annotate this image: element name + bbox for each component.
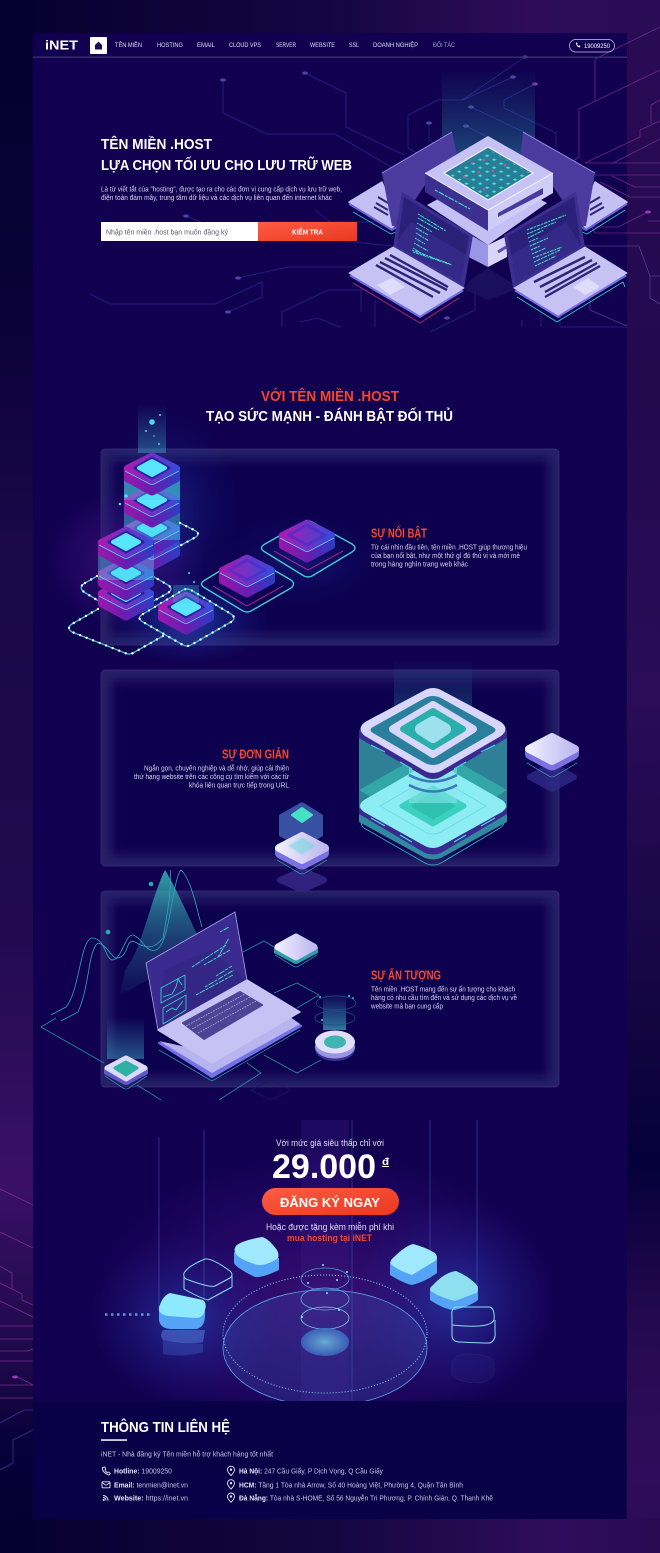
heading: su don gian: SỰ ĐƠN GIẢN: [222, 746, 289, 762]
heading: su noi bat: SỰ NỔI BẬT: [371, 526, 427, 540]
body: su noi bat: của bạn nổi bật, như một thứ gì đó thú vị và mới mẻ: [371, 552, 520, 560]
heading: su an tuong: SỰ ẤN TƯỢNG: [371, 968, 441, 982]
search form: [101, 222, 357, 241]
solid tracks: [202, 521, 355, 612]
laptop: [146, 912, 301, 1077]
price label: Với mức giá siêu thấp chỉ với: [276, 1138, 384, 1148]
illustration: glowing block towers: [45, 403, 380, 665]
illustration: server with laptops: [349, 72, 627, 323]
body: su don gian: Ngắn gọn, chuyên nghiệp và dễ nhớ, giúp cải thiện: [144, 764, 289, 772]
body: su noi bat: Từ cái nhìn đầu tiên, tên miền .HOST giúp thương hiệu: [371, 542, 527, 552]
dotted tracks: [69, 523, 234, 654]
hero description: Là từ viết tắt của "hosting", được tạo ra cho các đơn vị cung cấp dịch vụ lưu trữ web,: [101, 184, 342, 194]
illustration: glowing platform: [85, 1120, 565, 1450]
menu items: EMAIL: [197, 43, 216, 49]
search form: KIỂM TRA: [292, 227, 323, 236]
single blocks: [158, 594, 214, 634]
contact list: [102, 1466, 493, 1503]
footer: [33, 1401, 627, 1519]
body: su an tuong: Tên miền .HOST mang đến sự ấn tượng cho khách: [371, 984, 515, 994]
walls: [382, 132, 595, 226]
body: su don gian: thứ hạng website trên các công cụ tìm kiếm với các từ: [134, 772, 289, 781]
pricing section: [85, 1120, 565, 1450]
illustration: laptop with charts: [41, 870, 356, 1100]
hero title: LỰA CHỌN TỐI ƯU CHO LƯU TRỮ WEB: [101, 156, 352, 174]
footer heading: THÔNG TIN LIÊN HỆ: [101, 1418, 230, 1436]
body: su don gian: khóa liên quan trực tiếp trong URL: [189, 780, 289, 790]
menu items: HOSTING: [157, 43, 183, 49]
phone pill: [570, 40, 614, 52]
particles: [119, 414, 195, 583]
heading underline: [101, 1439, 127, 1441]
menu items: TÊN MIỀN: [115, 41, 142, 49]
price: đ: [382, 1157, 390, 1168]
section heading: VỚI TÊN MIỀN .HOST: [261, 387, 399, 405]
back laptops: [349, 182, 627, 234]
hero description: [101, 184, 342, 202]
section heading: TẠO SỨC MẠNH - ĐÁNH BẬT ĐỐI THỦ: [206, 407, 453, 425]
lower server: [427, 172, 547, 300]
floating blocks: [159, 1237, 495, 1383]
cylinder: [301, 1268, 349, 1329]
tagline: iNET - Nhà đăng ký Tên miền hỗ trợ khách hàng tốt nhất: [101, 1450, 273, 1458]
email: Email: tenmien@inet.vn: [114, 1480, 188, 1489]
logo: iNET: [45, 38, 78, 52]
menu items: SSL: [349, 43, 360, 49]
tower front: [98, 580, 154, 620]
teal square block: [104, 1017, 148, 1089]
da nang address: Đà Nẵng: Tòa nhà S-HOME, Số 56 Nguyễn Tri Phương, P. Chính Gián, Q. Thanh Khê: [239, 1494, 493, 1503]
dotted trail: [105, 1313, 153, 1316]
price: 29.000: [272, 1148, 376, 1186]
server top cube: [425, 136, 553, 231]
tower back: [138, 403, 166, 453]
body: su an tuong: hàng có nhu cầu tìm đến và sử dụng các dịch vụ về: [371, 993, 517, 1002]
panel: su noi bat: [45, 403, 559, 665]
hero title: [101, 135, 352, 174]
menu items: SERVER: [276, 43, 297, 49]
menu items: WEBSITE: [310, 43, 335, 49]
section heading: [206, 387, 453, 425]
chart waves: [51, 870, 205, 1021]
hero text: [101, 135, 357, 241]
register button: ĐĂNG KÝ NGAY: [280, 1195, 380, 1210]
body: su noi bat: [371, 542, 527, 568]
hotline: Hotline: 19009250: [114, 1467, 172, 1476]
body: su don gian: [134, 764, 289, 790]
note: mua hosting tại iNET: [287, 1233, 372, 1243]
menu items: DOANH NGHIỆP: [373, 41, 418, 49]
website: Website: https://inet.vn: [114, 1494, 188, 1503]
illustration: large glass cube: [359, 660, 507, 865]
menu items: [115, 41, 456, 49]
page panel: [33, 33, 627, 1401]
menu items: CLOUD VPS: [229, 43, 261, 49]
panel: su an tuong: [41, 870, 559, 1100]
menu items: ĐỐI TÁC: [433, 42, 456, 49]
laptop left: [349, 192, 473, 323]
phone pill: 19009250: [584, 43, 611, 50]
register button: [262, 1188, 399, 1215]
navigation bar: [33, 37, 627, 58]
body: su an tuong: website mà bạn cung cấp: [370, 1002, 443, 1010]
note: Hoặc được tặng kèm miễn phí khi: [266, 1222, 394, 1232]
outline diamond: [251, 1080, 291, 1100]
search form: Nhập tên miền .host bạn muốn đăng ký: [106, 227, 228, 236]
hanoi address: Hà Nội: 247 Cầu Giấy, P Dịch Vọng, Q Cầu Giấy: [239, 1467, 383, 1476]
hero description: điện toán đám mây, trung tâm dữ liệu và các dịch vụ liên quan đến internet khác: [101, 193, 332, 202]
body: su noi bat: trong hàng nghìn trang web khác: [371, 562, 468, 568]
home button: [90, 37, 107, 54]
hero circuit lines: [90, 55, 627, 332]
icon: right small block: [525, 737, 579, 789]
body: su an tuong: [370, 984, 517, 1010]
note: [266, 1222, 394, 1243]
ring disc with beam: [315, 993, 356, 1061]
light beam: [442, 72, 535, 172]
small cube: [274, 937, 318, 967]
panel: su don gian: [101, 660, 579, 890]
icon: small stacked cube: [275, 802, 329, 890]
laptop right: [504, 192, 627, 322]
hcm address: HCM: Tầng 1 Tòa nhà Arrow, Số 40 Hoàng Việt, Phường 4, Quận Tân Bình: [239, 1480, 463, 1489]
platform ellipses: [223, 1290, 427, 1406]
connector lines: [41, 941, 321, 1100]
hero title: TÊN MIỀN .HOST: [101, 135, 212, 153]
